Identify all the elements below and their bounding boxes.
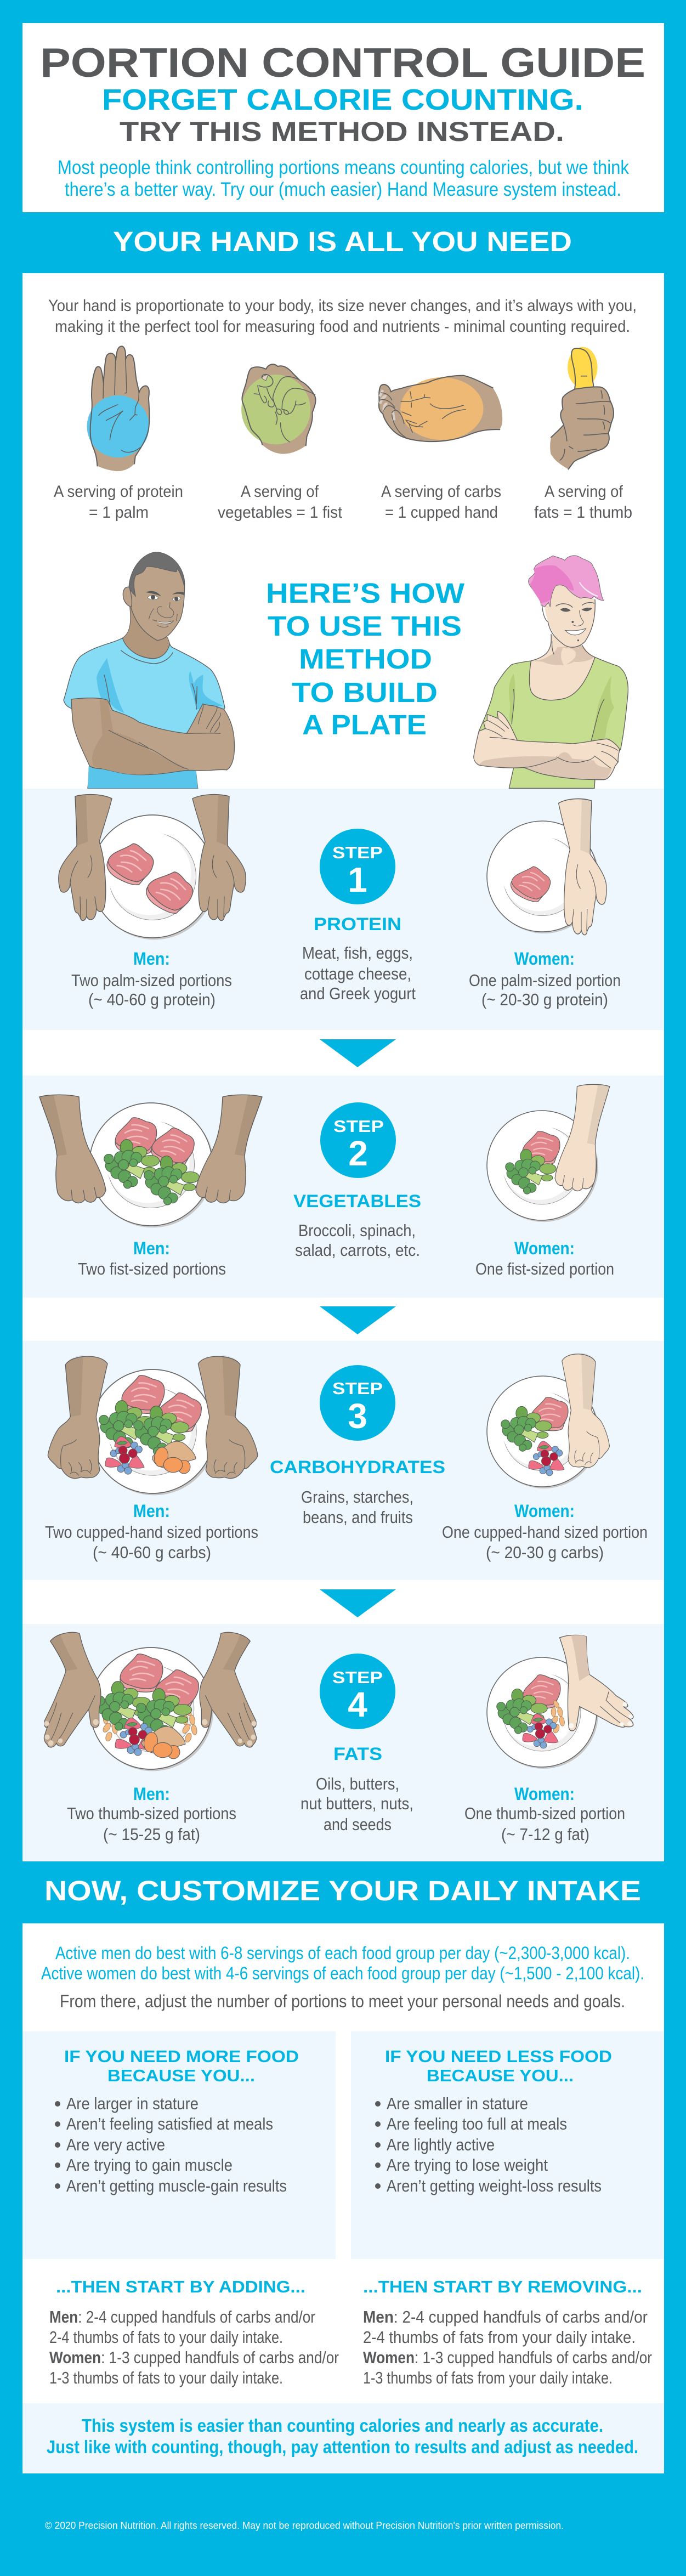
panel: need more food (22, 2031, 336, 2259)
step 3 women portion (442, 1501, 648, 1562)
less food bullet list: Are lightly active (387, 2135, 495, 2154)
men plate: protein (59, 795, 246, 939)
icon: palm with blue protein circle (87, 346, 149, 471)
step 3 women portion: One cupped-hand sized portion (442, 1522, 648, 1542)
step 3 badge: STEP (332, 1379, 383, 1398)
adding instructions: Men: 2-4 cupped handfuls of carbs and/or (49, 2307, 315, 2326)
arrow: step 1 to step 2 (320, 1039, 396, 1067)
illustration: woman with pink hair and crossed arms (474, 556, 628, 788)
icon: fist with green vegetable circle (241, 364, 316, 454)
daily intake background (22, 1923, 664, 2473)
women plate: protein (487, 799, 606, 935)
more food heading: IF YOU NEED MORE FOOD (64, 2047, 299, 2066)
step 4 badge (320, 1654, 395, 1729)
heading: how to use this method: TO USE THIS (268, 610, 462, 642)
panel: step 3 carbohydrates (22, 1341, 664, 1580)
step 2 men portion: Men: (133, 1238, 170, 1258)
panel: daily intake (22, 1923, 664, 2473)
step 2 men portion (78, 1238, 226, 1278)
heading: how to use this method: HERE’S HOW (266, 578, 465, 609)
step 3 foods: Grains, starches, (301, 1487, 413, 1507)
step 4 foods: and seeds (324, 1815, 392, 1834)
hand measure intro text (48, 297, 637, 336)
step 1 background (22, 789, 664, 1030)
more food bullet list: Are trying to gain muscle (66, 2155, 233, 2175)
arrow: step 3 to step 4 (320, 1589, 396, 1617)
step 3 women portion: Women: (514, 1501, 575, 1521)
step 2 women portion (475, 1238, 614, 1278)
step 1 women portion (469, 949, 621, 1009)
step 1 women portion: Women: (514, 949, 575, 969)
intro text (58, 157, 629, 200)
step 2 badge: STEP (333, 1117, 384, 1136)
panel: need less food (351, 2031, 664, 2259)
panel: header card (22, 23, 664, 212)
step 1 women portion: (~ 20-30 g protein) (481, 990, 608, 1009)
heading: your hand: YOUR HAND IS ALL YOU NEED (113, 226, 572, 257)
step 1 foods: and Greek yogurt (300, 984, 416, 1003)
subtitle line two: TRY THIS METHOD INSTEAD. (120, 116, 564, 147)
hand measure intro text: Your hand is proportionate to your body, its size never changes, and it’s always with you, (48, 297, 637, 315)
step 1 foods: Meat, fish, eggs, (302, 943, 413, 963)
step 4 men portion (67, 1784, 236, 1844)
header card background (22, 23, 664, 212)
step 3 background (22, 1341, 664, 1580)
caption: fat serving: fats = 1 thumb (534, 503, 632, 522)
heading: how to use this method: TO BUILD (292, 677, 438, 708)
step 4 foods: Oils, butters, (316, 1774, 399, 1793)
step 4 men portion: Men: (133, 1784, 170, 1804)
hand measure intro text: making it the perfect tool for measuring food and nutrients - minimal counting required. (55, 318, 630, 336)
step 3 title: CARBOHYDRATES (270, 1457, 445, 1477)
step 2 title: VEGETABLES (293, 1191, 421, 1211)
step 3 men portion: (~ 40-60 g carbs) (93, 1543, 211, 1562)
closing note text: This system is easier than counting calories and nearly as accurate. (82, 2415, 603, 2436)
adding instructions: 1-3 thumbs of fats to your daily intake. (49, 2368, 283, 2387)
less food heading (385, 2047, 612, 2085)
step 1 badge: STEP (332, 843, 383, 862)
step 3 men portion (45, 1501, 258, 1562)
less food bullet list: Aren’t getting weight-loss results (387, 2176, 602, 2195)
closing note background (22, 2403, 664, 2473)
servings guidance: From there, adjust the number of portions to meet your personal needs and goals. (60, 1991, 625, 2011)
panel: step 4 fats (22, 1624, 664, 1861)
heading: how to use this method (266, 578, 465, 740)
step 3 men portion: Men: (133, 1501, 170, 1521)
title: PORTION CONTROL GUIDE (40, 39, 645, 86)
more food background (22, 2031, 336, 2259)
step 3 women portion: (~ 20-30 g carbs) (486, 1543, 604, 1562)
panel: step 1 protein (22, 789, 664, 1030)
step 3 men portion: Two cupped-hand sized portions (45, 1522, 258, 1542)
less food heading: BECAUSE YOU... (427, 2066, 574, 2085)
step 2 badge: 2 (348, 1134, 368, 1173)
more food bullet list (55, 2094, 287, 2195)
more food heading (64, 2047, 299, 2085)
step 1 men portion (71, 949, 232, 1009)
less food bullet list: Are smaller in stature (387, 2094, 528, 2113)
icon: thumb with yellow fat oval (550, 347, 614, 469)
removing instructions: Men: 2-4 cupped handfuls of carbs and/or (363, 2307, 648, 2326)
step 3 badge (320, 1365, 395, 1441)
panel: closing note (22, 2403, 664, 2473)
step 4 badge: STEP (332, 1668, 383, 1687)
step 4 title: FATS (333, 1744, 382, 1764)
subtitle line one: FORGET CALORIE COUNTING. (102, 83, 583, 116)
step 3 foods: beans, and fruits (303, 1508, 413, 1527)
step 2 men portion: Two fist-sized portions (78, 1259, 226, 1278)
caption: carb serving (381, 483, 501, 522)
caption: fat serving (534, 483, 632, 522)
step 2 women portion: Women: (514, 1238, 575, 1258)
intro text: there’s a better way. Try our (much easier) Hand Measure system instead. (65, 179, 621, 200)
women plate: fats (487, 1635, 633, 1769)
women plate: carbohydrates (487, 1353, 609, 1488)
more food bullet list: Aren’t getting muscle-gain results (66, 2176, 287, 2195)
step 2 badge (320, 1102, 396, 1178)
panel: step 2 vegetables (22, 1075, 664, 1298)
caption: protein serving: = 1 palm (89, 503, 149, 522)
step 4 men portion: (~ 15-25 g fat) (103, 1825, 200, 1844)
closing note text (47, 2415, 638, 2457)
step 2 women portion: One fist-sized portion (475, 1259, 614, 1278)
caption: carb serving: = 1 cupped hand (385, 503, 498, 522)
step 4 women portion: Women: (514, 1784, 575, 1804)
step 4 women portion: One thumb-sized portion (464, 1804, 625, 1823)
intro text: Most people think controlling portions means counting calories, but we think (58, 157, 629, 178)
step 1 title: PROTEIN (314, 914, 401, 934)
less food heading: IF YOU NEED LESS FOOD (385, 2047, 612, 2066)
heading: how to use this method: A PLATE (302, 709, 427, 740)
step 4 women portion: (~ 7-12 g fat) (501, 1825, 589, 1844)
removing heading: ...THEN START BY REMOVING... (363, 2277, 642, 2296)
step 3 badge: 3 (348, 1396, 367, 1436)
heading: how to use this method: METHOD (299, 643, 432, 675)
icon: cupped hand with orange carb circle (379, 376, 502, 441)
caption: protein serving: A serving of protein (54, 483, 183, 501)
panel: hand measures and plate steps background (22, 273, 664, 1861)
adding instructions: 2-4 thumbs of fats to your daily intake. (49, 2328, 283, 2347)
servings guidance (41, 1943, 644, 2011)
adding instructions: Women: 1-3 cupped handfuls of carbs and/or (49, 2348, 339, 2367)
step 4 badge: 4 (348, 1685, 367, 1724)
step 3 foods (301, 1487, 413, 1527)
men plate: vegetables (39, 1095, 262, 1227)
less food background (351, 2031, 664, 2259)
less food bullet list: Are trying to lose weight (387, 2155, 548, 2175)
caption: vegetable serving: A serving of (241, 483, 319, 501)
step 2 foods (295, 1221, 420, 1260)
step 1 men portion: Men: (133, 949, 170, 969)
step 2 foods: Broccoli, spinach, (298, 1221, 416, 1240)
caption: fat serving: A serving of (545, 483, 623, 501)
step 2 background (22, 1075, 664, 1298)
adding heading: ...THEN START BY ADDING... (56, 2277, 305, 2296)
illustration: man with crossed arms (64, 552, 234, 788)
removing instructions: 2-4 thumbs of fats from your daily intake. (363, 2328, 636, 2347)
heading: customize daily intake: NOW, CUSTOMIZE YOUR DAILY INTAKE (44, 1875, 641, 1906)
step 1 men portion: (~ 40-60 g protein) (88, 990, 216, 1009)
step 1 badge (320, 829, 395, 904)
caption: protein serving (54, 483, 183, 522)
more food bullet list: Aren’t feeling satisfied at meals (66, 2114, 273, 2133)
step 4 women portion (464, 1784, 625, 1844)
step 1 foods (300, 943, 416, 1003)
removing instructions: 1-3 thumbs of fats from your daily intake. (363, 2368, 613, 2387)
copyright footer: © 2020 Precision Nutrition. All rights reserved. May not be reproduced without Precision Nutrition's prior written permission. (45, 2520, 564, 2531)
men plate: carbohydrates (48, 1355, 258, 1495)
less food bullet list: Are feeling too full at meals (387, 2114, 567, 2133)
step 2 foods: salad, carrots, etc. (295, 1241, 420, 1260)
arrow: step 2 to step 3 (320, 1306, 396, 1334)
step 1 men portion: Two palm-sized portions (71, 971, 232, 990)
caption: vegetable serving: vegetables = 1 fist (218, 503, 343, 522)
more food bullet list: Are very active (66, 2135, 165, 2154)
women plate: vegetables (487, 1084, 610, 1222)
caption: vegetable serving (218, 483, 343, 522)
more food heading: BECAUSE YOU... (107, 2066, 255, 2085)
adding instructions (49, 2307, 339, 2387)
more food bullet list: Are larger in stature (66, 2094, 199, 2113)
removing instructions (363, 2307, 652, 2387)
step 4 foods: nut butters, nuts, (301, 1794, 413, 1813)
step 1 badge: 1 (348, 860, 367, 899)
step 4 background (22, 1624, 664, 1861)
step 1 women portion: One palm-sized portion (469, 971, 621, 990)
step 4 foods (301, 1774, 413, 1834)
less food bullet list (375, 2094, 602, 2195)
step 1 foods: cottage cheese, (304, 964, 411, 983)
caption: carb serving: A serving of carbs (381, 483, 501, 501)
men plate: fats (44, 1632, 257, 1771)
step 4 men portion: Two thumb-sized portions (67, 1804, 236, 1823)
